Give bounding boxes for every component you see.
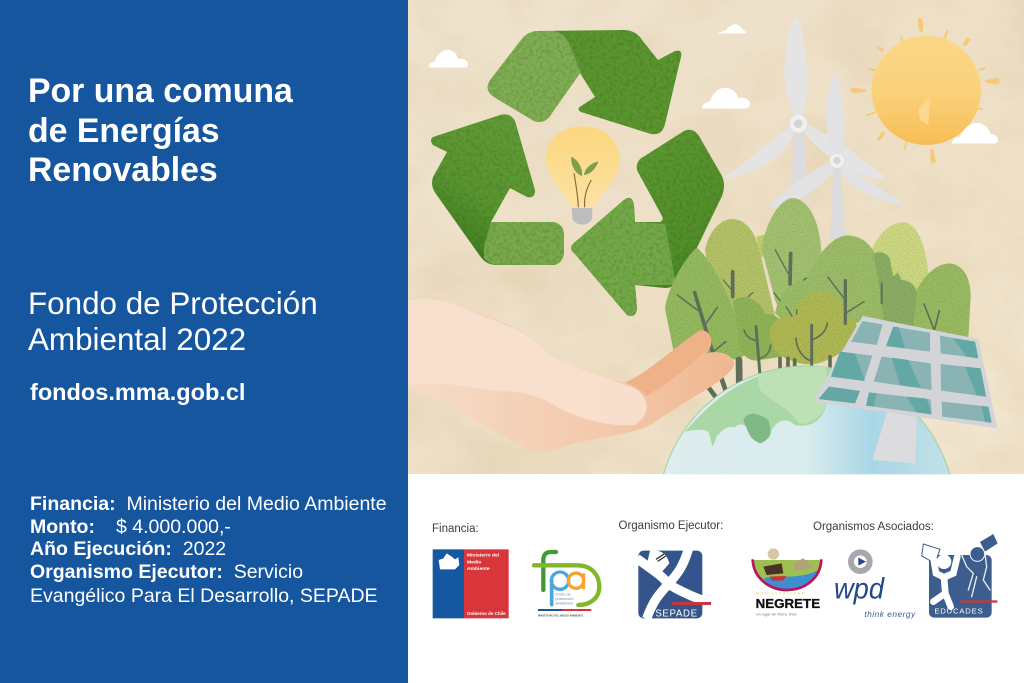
title: Por una comuna [28,72,293,110]
panel frame [812,316,997,428]
icon: open hand [408,299,735,452]
tree: small center [775,280,809,323]
globe: land [685,366,833,447]
trees [663,198,971,474]
logo: wpd [834,552,916,619]
logo: SEPADE [637,549,711,620]
arrow: left [431,114,564,265]
text block: project details: Evangélico Para El Desarrollo, SEPADE [30,585,378,607]
logo: Ministerio del Medio Ambiente: Gobierno de Chile [467,611,506,616]
arrow: right [571,130,724,316]
logo: Municipalidad de Negrete: NEGRETE [756,596,820,611]
hub front [829,153,845,168]
hand: palm highlight [408,299,647,425]
wind turbines [722,17,907,240]
coat of arms [439,553,459,569]
logo: Ministerio del Medio Ambiente: Ministerio del [467,553,500,559]
icon: light bulb with sprout [546,126,620,225]
turbine front [768,74,907,240]
heading: fund name: Ambiental 2022 [28,322,246,357]
icon: clouds [429,24,998,143]
logo: SEPADE: SEPADE [655,609,698,620]
logo: FPA: MINISTERIO DEL MEDIO AMBIENTE [538,614,584,618]
logo: Municipalidad de Negrete [753,548,821,616]
text block: project details: Financia: Ministerio del Medio Ambiente [30,493,387,515]
icon: solar panel [812,316,997,463]
website link: fondos.mma.gob.cl [30,379,245,405]
hand: upper finger [625,331,711,396]
tree: back yellow [872,222,929,323]
text block: project details: Organismo Ejecutor: Servicio [30,561,303,583]
illustration and logos [408,0,1024,618]
text block: project details: $ 4.000.000,- [116,516,231,538]
bush: olive front [770,291,857,364]
globe [663,366,950,474]
heading: fund name: Fondo de Protección [28,286,318,321]
figure left [937,554,951,569]
caption: financia: Financia: [432,523,479,535]
text block: project details [30,493,387,607]
caption: organismo ejecutor: Organismo Ejecutor: [618,520,723,532]
figure right [970,547,985,561]
captions [432,520,934,535]
title: Renovables [28,151,218,189]
icon: sun [851,18,999,163]
logo: FPA: protección [555,596,574,601]
logo: wpd: think energy [864,609,916,619]
arrow: top [488,30,681,134]
title: de Energías [28,112,220,150]
logo: FPA: ambiental [555,601,573,606]
hub back [789,114,808,133]
tree: left [665,247,745,360]
text block: project details: Año Ejecución: 2022 [30,538,226,560]
panel stand [872,412,917,463]
turbine back [722,17,885,203]
panel cells [819,321,992,423]
heading: fund name [28,286,318,357]
logo: Ministerio del Medio Ambiente: Medio [467,559,481,565]
tree: back olive [705,219,776,363]
bush: right shaded [873,252,917,327]
tree: back center [762,198,823,320]
title [28,72,293,189]
text block: project details: Monto: [30,516,95,538]
panel: blue project information [0,0,408,683]
bulb glass [546,126,620,208]
sprout [574,173,591,207]
caption: organismos asociados: Organismos Asociados: [813,521,934,533]
logo: FPA [534,552,599,618]
logo: Ministerio del Medio Ambiente: Ambiente [467,566,490,572]
logo: Municipalidad de Negrete: Un lugar de Tierra, Ríos [756,612,797,616]
trunks [677,250,939,398]
logo: wpd: wpd [834,572,885,605]
paper background [408,0,1024,475]
logo: EDUCADES [922,534,998,618]
tree: right [893,263,971,338]
tree: round [733,297,782,361]
tree: center [803,235,884,323]
logo: Ministerio del Medio Ambiente [433,549,509,618]
bulb base [572,208,592,225]
logo: Municipalidad de Negrete: MUNICIPALIDAD [756,592,806,596]
icon: recycling arrows [431,30,724,316]
logo: FPA: fondo de [555,591,572,596]
logo: EDUCADES: EDUCADES [934,606,984,615]
